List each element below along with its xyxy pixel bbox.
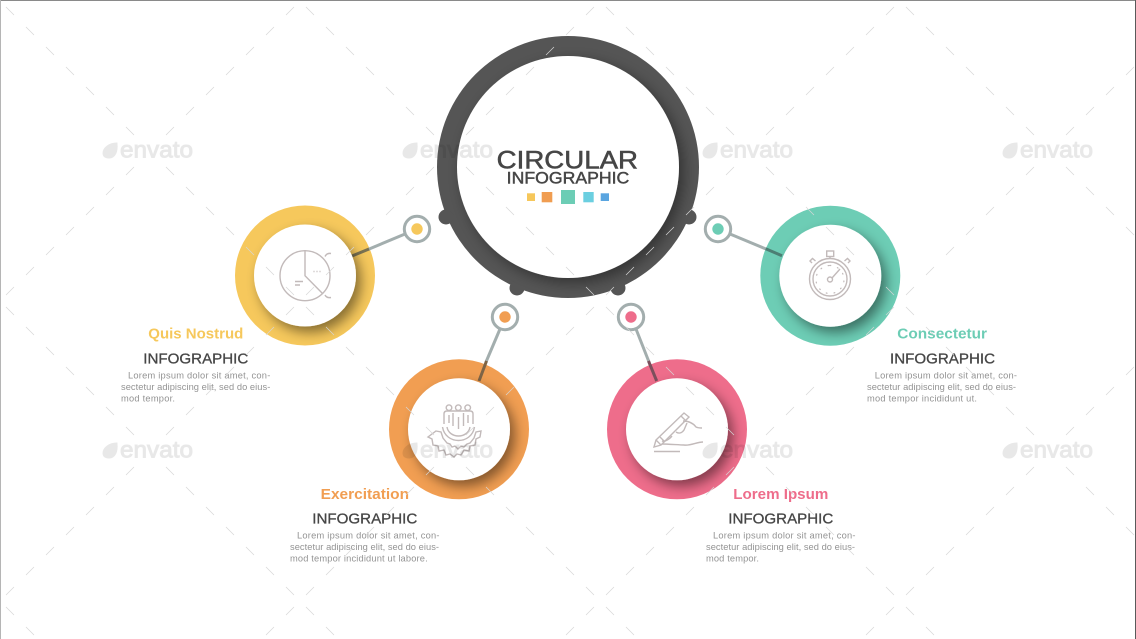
text: Quis Nostrud: INFOGRAPHIC [143, 351, 248, 367]
text: Consectetur: sectetur adipiscing elit, sed do eius- [867, 382, 1016, 392]
text: Consectetur [867, 326, 1017, 404]
watermark: envato logos: envato [1020, 136, 1093, 162]
node: orange [389, 304, 529, 499]
watermark: envato logos: envato [720, 136, 793, 162]
text: Quis Nostrud: sectetur adipiscing elit, sed do eius- [121, 382, 270, 392]
watermark: envato logos: envato [420, 136, 493, 162]
text: Lorem Ipsum: sectetur adipiscing elit, sed do eius- [706, 542, 855, 552]
center title: INFOGRAPHIC [507, 169, 629, 187]
text: Consectetur: INFOGRAPHIC [890, 351, 995, 367]
text: Lorem Ipsum: Lorem ipsum dolor sit amet, con- [713, 530, 856, 540]
watermark: envato logos: envato [1020, 436, 1093, 462]
node: yellow [235, 206, 430, 346]
text: Exercitation: INFOGRAPHIC [312, 511, 417, 527]
text: Quis Nostrud: Quis Nostrud [148, 326, 243, 342]
watermark: envato logos: envato [720, 436, 793, 462]
icon: stopwatch [810, 251, 850, 300]
text: Exercitation: Exercitation [321, 487, 409, 503]
text: Consectetur: mod tempor incididunt ut. [867, 394, 977, 404]
text: Lorem Ipsum: Lorem Ipsum [733, 487, 828, 503]
center title: CIRCULAR [497, 146, 638, 174]
text: Exercitation: Lorem ipsum dolor sit amet, con- [297, 530, 440, 540]
icon: hand writing [654, 413, 703, 452]
text: Quis Nostrud [121, 326, 270, 404]
watermark: envato logos: envato [120, 136, 193, 162]
icon: people on gear [428, 405, 481, 457]
watermark: envato logos [103, 136, 1093, 462]
watermark: envato logos: envato [420, 436, 493, 462]
text: Lorem Ipsum: mod tempor. [706, 554, 759, 564]
watermark: envato logos: envato [120, 436, 193, 462]
center title [497, 146, 638, 187]
icon: pie chart [280, 251, 331, 301]
text: Lorem Ipsum: INFOGRAPHIC [728, 511, 833, 527]
text: Exercitation: mod tempor incididunt ut labore. [290, 554, 428, 564]
node: pink [607, 304, 747, 499]
colored squares [527, 190, 609, 204]
text: Consectetur: Lorem ipsum dolor sit amet, con- [875, 370, 1017, 380]
node: green [705, 206, 900, 346]
text: Quis Nostrud: mod tempor. [121, 394, 175, 404]
text: Exercitation [290, 487, 440, 564]
center ring [437, 36, 699, 298]
text: Lorem Ipsum [706, 487, 856, 564]
text: Quis Nostrud: Lorem ipsum dolor sit amet, con- [128, 370, 270, 380]
text: Consectetur: Consectetur [897, 326, 987, 342]
text: Exercitation: sectetur adipiscing elit, sed do eius- [290, 542, 439, 552]
